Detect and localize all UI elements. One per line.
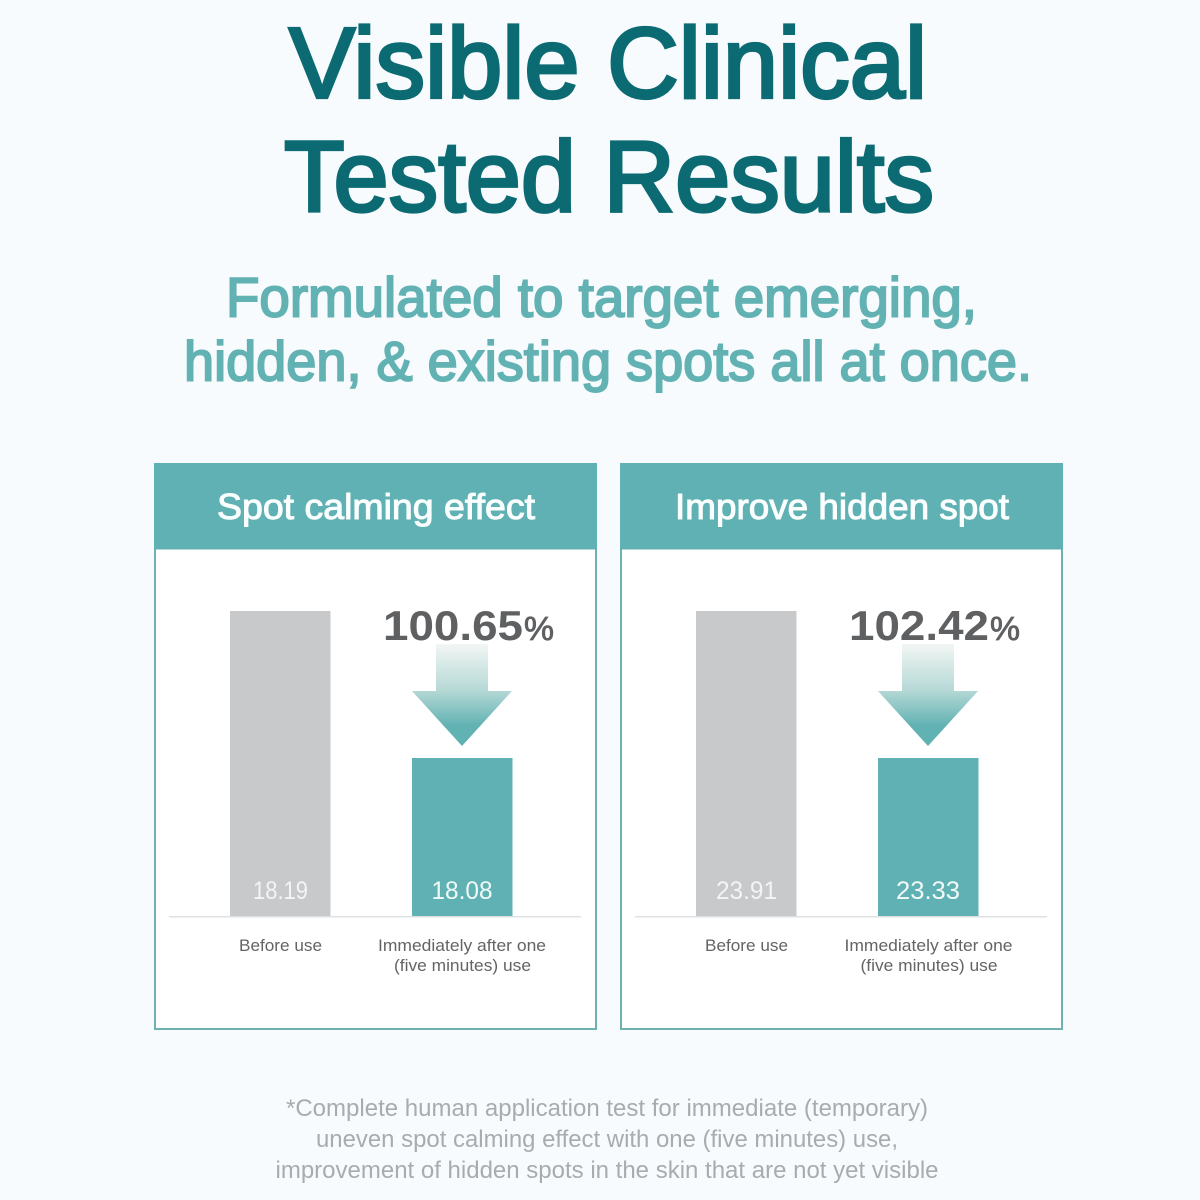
subtitle: [184, 266, 1032, 392]
label: after use: Immediately after one: [844, 936, 1012, 955]
percentage callout: 100.65: [383, 602, 523, 649]
panel header: [620, 463, 1063, 550]
baseline: [635, 916, 1047, 918]
subtitle: hidden, & existing spots all at once.: [184, 330, 1032, 392]
panel frame: [621, 464, 1062, 1029]
panel: spot calming effect: [154, 463, 597, 1029]
bar: after use: [412, 758, 512, 917]
value: after: 18.08: [432, 877, 492, 905]
panel heading: Improve hidden spot: [675, 486, 1009, 527]
bar: before use: [230, 611, 330, 917]
bar: after use: [878, 758, 978, 917]
percentage callout: 102.42: [849, 602, 989, 649]
label: before use: Before use: [705, 936, 788, 955]
panel frame: [155, 464, 596, 1029]
title: Tested Results: [284, 121, 934, 233]
panel header: [154, 463, 597, 550]
arrow: decrease: [412, 644, 512, 746]
title: Visible Clinical: [289, 8, 927, 120]
arrow: decrease: [878, 644, 978, 746]
footnote: *Complete human application test for immediate (temporary): [286, 1095, 928, 1122]
percentage callout: %: [990, 610, 1020, 647]
label: after use: [844, 936, 1012, 975]
bar: before use: [696, 611, 796, 917]
footnote: improvement of hidden spots in the skin that are not yet visible: [276, 1157, 938, 1184]
label: after use: Immediately after one: [378, 936, 546, 955]
baseline: [169, 916, 581, 918]
panel heading: Spot calming effect: [217, 486, 535, 527]
label: after use: (five minutes) use: [860, 956, 998, 975]
value: before: 18.19: [253, 877, 308, 905]
label: after use: [378, 936, 546, 975]
title: [284, 8, 934, 233]
percentage callout: %: [524, 610, 554, 647]
value: after: 23.33: [896, 877, 960, 905]
value: before: 23.91: [716, 877, 777, 905]
footnote: uneven spot calming effect with one (five minutes) use,: [316, 1126, 898, 1153]
label: before use: Before use: [239, 936, 322, 955]
subtitle: Formulated to target emerging,: [226, 266, 977, 328]
label: after use: (five minutes) use: [394, 956, 531, 975]
footnote: [276, 1095, 938, 1184]
panel: improve hidden spot: [620, 463, 1063, 1029]
